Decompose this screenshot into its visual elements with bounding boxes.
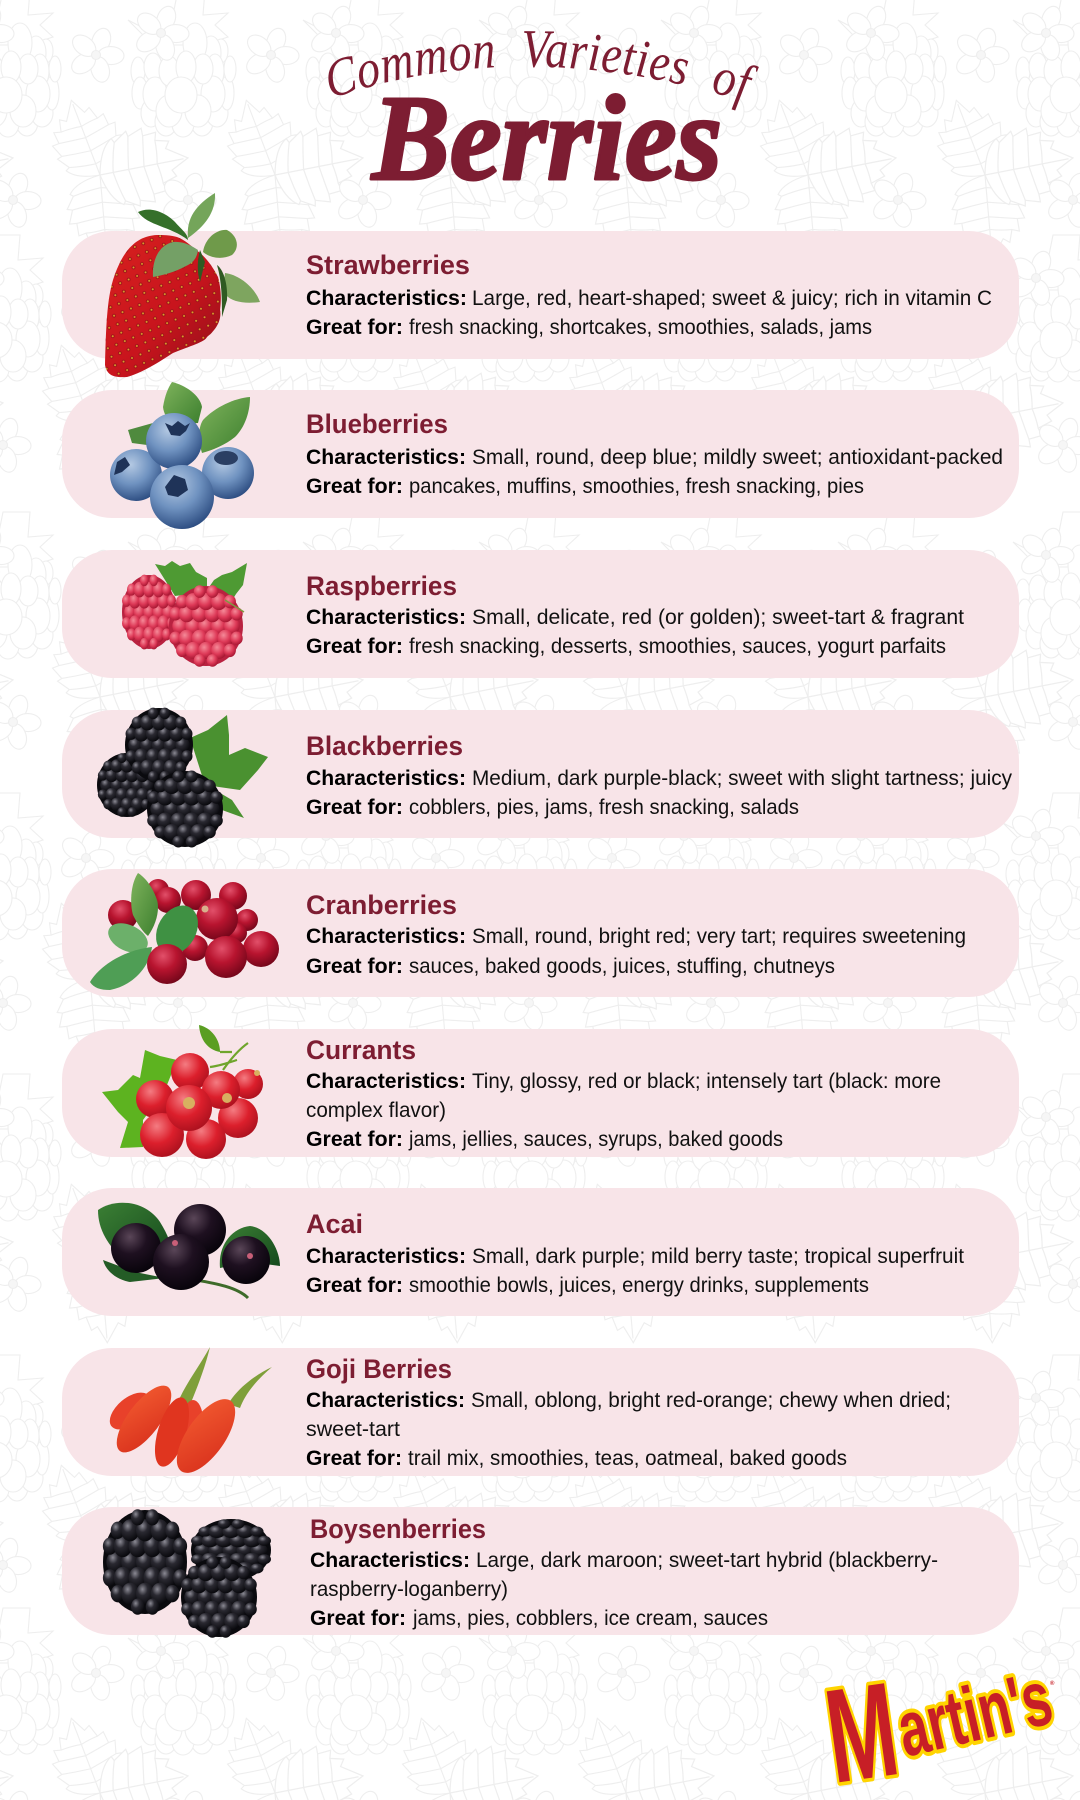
logo: Martin's: ®	[1050, 1680, 1055, 1687]
characteristics text: Small, oblong, bright red-orange; chewy when dried;	[471, 1389, 951, 1412]
heading: Acai	[306, 1209, 363, 1239]
icon: blueberries	[110, 382, 254, 529]
characteristics text: Characteristics:	[306, 925, 466, 948]
characteristics text: raspberry-loganberry)	[310, 1578, 508, 1601]
great for text: pancakes, muffins, smoothies, fresh snacking, pies	[409, 475, 864, 498]
great for text: Great for:	[306, 1128, 403, 1151]
great for text: Great for:	[306, 475, 403, 498]
characteristics text: Characteristics:	[306, 1389, 465, 1412]
characteristics text: Characteristics:	[306, 446, 466, 469]
great for text: cobblers, pies, jams, fresh snacking, salads	[409, 796, 799, 819]
panel: boysenberries	[62, 1507, 1019, 1638]
panel: blackberries	[62, 708, 1019, 848]
panel: blueberries	[62, 382, 1019, 529]
icon: goji berries	[103, 1347, 272, 1482]
great for text: Great for:	[306, 316, 403, 339]
panel: cranberries	[62, 869, 1019, 997]
heading: Blackberries	[306, 731, 463, 761]
logo: Martin's	[817, 1653, 1060, 1800]
great for text: Great for:	[306, 635, 403, 658]
title: main word: Berries	[370, 71, 722, 206]
great for text: trail mix, smoothies, teas, oatmeal, baked goods	[408, 1447, 847, 1470]
characteristics text: Small, dark purple; mild berry taste; tropical superfruit	[472, 1245, 964, 1268]
icon: boysenberries	[103, 1509, 271, 1638]
great for text: Great for:	[306, 1274, 403, 1297]
characteristics text: sweet-tart	[306, 1418, 400, 1441]
heading: Strawberries	[306, 250, 470, 280]
characteristics text: Medium, dark purple-black; sweet with slight tartness; juicy	[472, 767, 1012, 790]
great for text: jams, pies, cobblers, ice cream, sauces	[412, 1607, 768, 1630]
characteristics text: Tiny, glossy, red or black; intensely tart (black: more	[472, 1070, 941, 1093]
characteristics text: Large, red, heart-shaped; sweet & juicy; rich in vitamin C	[472, 287, 992, 310]
great for text: jams, jellies, sauces, syrups, baked goods	[408, 1128, 783, 1151]
characteristics text: Characteristics:	[306, 1070, 466, 1093]
icon: strawberry	[100, 193, 260, 380]
icon: blackberries	[97, 708, 268, 848]
heading: Goji Berries	[306, 1354, 452, 1384]
characteristics text: Small, round, bright red; very tart; requires sweetening	[472, 925, 966, 948]
icon: currants	[102, 1025, 263, 1159]
characteristics text	[306, 1389, 951, 1441]
icon: raspberries	[122, 561, 247, 667]
heading: Boysenberries	[310, 1514, 486, 1544]
panel: strawberries	[62, 193, 1019, 380]
characteristics text: Small, delicate, red (or golden); sweet-tart & fragrant	[472, 606, 964, 629]
characteristics text: Characteristics:	[310, 1549, 470, 1572]
characteristics text: Characteristics:	[306, 606, 466, 629]
title	[328, 31, 759, 206]
great for text: sauces, baked goods, juices, stuffing, chutneys	[409, 955, 835, 978]
characteristics text	[306, 1070, 941, 1122]
characteristics text: Characteristics:	[306, 1245, 466, 1268]
characteristics text	[310, 1549, 938, 1601]
heading: Currants	[306, 1035, 416, 1065]
heading: Cranberries	[306, 890, 457, 920]
great for text: Great for:	[306, 955, 403, 978]
characteristics text: Characteristics:	[306, 767, 466, 790]
great for text: smoothie bowls, juices, energy drinks, supplements	[409, 1274, 869, 1297]
great for text: Great for:	[306, 796, 403, 819]
icon: cranberries	[90, 873, 279, 990]
heading: Raspberries	[306, 571, 457, 601]
great for text: fresh snacking, desserts, smoothies, sauces, yogurt parfaits	[409, 635, 946, 658]
panel: currants	[62, 1025, 1019, 1159]
great for text: fresh snacking, shortcakes, smoothies, salads, jams	[409, 316, 872, 339]
characteristics text: Characteristics:	[306, 287, 467, 310]
great for text: Great for:	[306, 1447, 402, 1470]
characteristics text: complex flavor)	[306, 1099, 446, 1122]
title: curved line: Common Varieties of	[328, 31, 759, 110]
characteristics text: Large, dark maroon; sweet-tart hybrid (blackberry-	[476, 1549, 938, 1572]
characteristics text: Small, round, deep blue; mildly sweet; antioxidant-packed	[472, 446, 1003, 469]
great for text: Great for:	[310, 1607, 406, 1630]
icon: acai berries	[98, 1203, 280, 1298]
heading: Blueberries	[306, 409, 448, 439]
panel: raspberries	[62, 550, 1019, 678]
panel: goji berries	[62, 1347, 1019, 1482]
panel: acai	[62, 1188, 1019, 1316]
